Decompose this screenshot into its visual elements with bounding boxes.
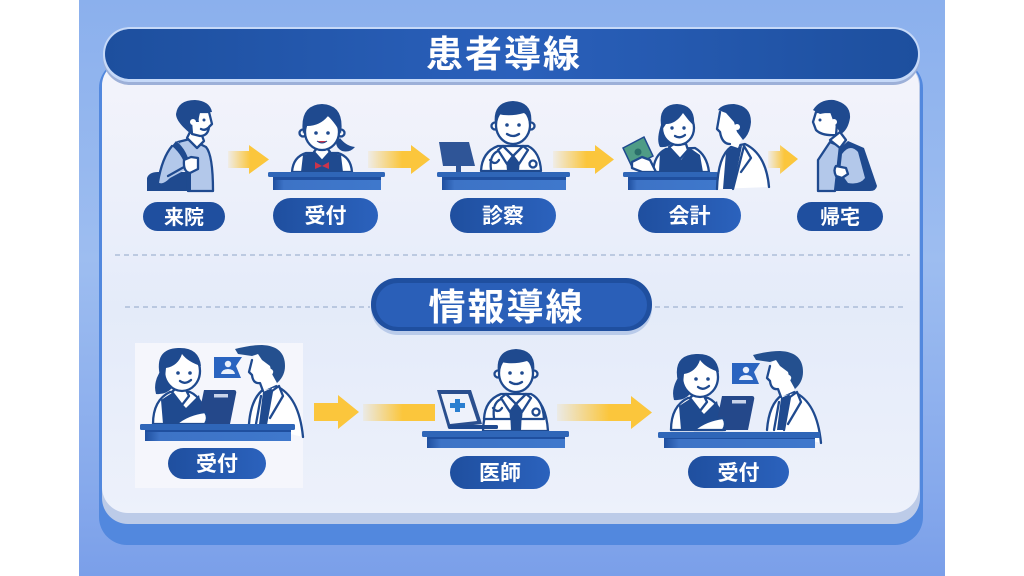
label: 帰宅: 帰宅: [820, 206, 860, 229]
label: 医師: [450, 456, 550, 489]
arrow 6: [557, 396, 652, 429]
arrow 1: [228, 145, 269, 174]
arrow 4: [768, 145, 798, 174]
label: 会計: [638, 198, 741, 233]
label: 受付: 受付: [718, 462, 760, 485]
step: 会計 cashier and doctor: [623, 104, 769, 190]
label: 受付: 受付: [196, 453, 238, 476]
title bar: 患者導線: 患者導線: [426, 34, 582, 75]
arrow 3: [553, 145, 614, 174]
divider: [115, 254, 910, 256]
divider left: [125, 306, 370, 308]
title bar: 患者導線: [103, 27, 920, 85]
arrow 5 tail: [363, 404, 435, 421]
label: 受付: [273, 198, 378, 233]
arrow 2: [368, 145, 430, 174]
panel: main card: [99, 60, 923, 545]
label: 受付: 受付: [304, 205, 346, 228]
label: 会計: 会計: [668, 205, 710, 228]
label: 診察: 診察: [482, 205, 524, 228]
step: 来院 patient: [147, 100, 213, 191]
step: 受付 staff and doctor: [140, 345, 303, 441]
step: 医師 doctor at laptop: [422, 349, 569, 448]
label: 受付: [688, 456, 789, 488]
step: 受付 receptionist: [268, 104, 385, 190]
divider right: [655, 306, 905, 308]
step: 診察 doctor: [437, 101, 570, 190]
label: 受付: [168, 448, 266, 479]
step: 帰宅 patient: [813, 100, 877, 191]
white box behind first 情報導線 step: [135, 343, 303, 488]
label: 医師: 医師: [479, 462, 521, 485]
step: 受付 staff and doctor again: [658, 351, 821, 448]
heading: 情報導線: 情報導線: [428, 287, 584, 328]
label: 帰宅: [797, 202, 883, 231]
label: 診察: [450, 198, 556, 233]
heading: 情報導線: [371, 278, 652, 335]
arrow 5: [314, 395, 359, 429]
label: 来院: 来院: [164, 206, 204, 229]
label: 来院: [143, 202, 225, 231]
